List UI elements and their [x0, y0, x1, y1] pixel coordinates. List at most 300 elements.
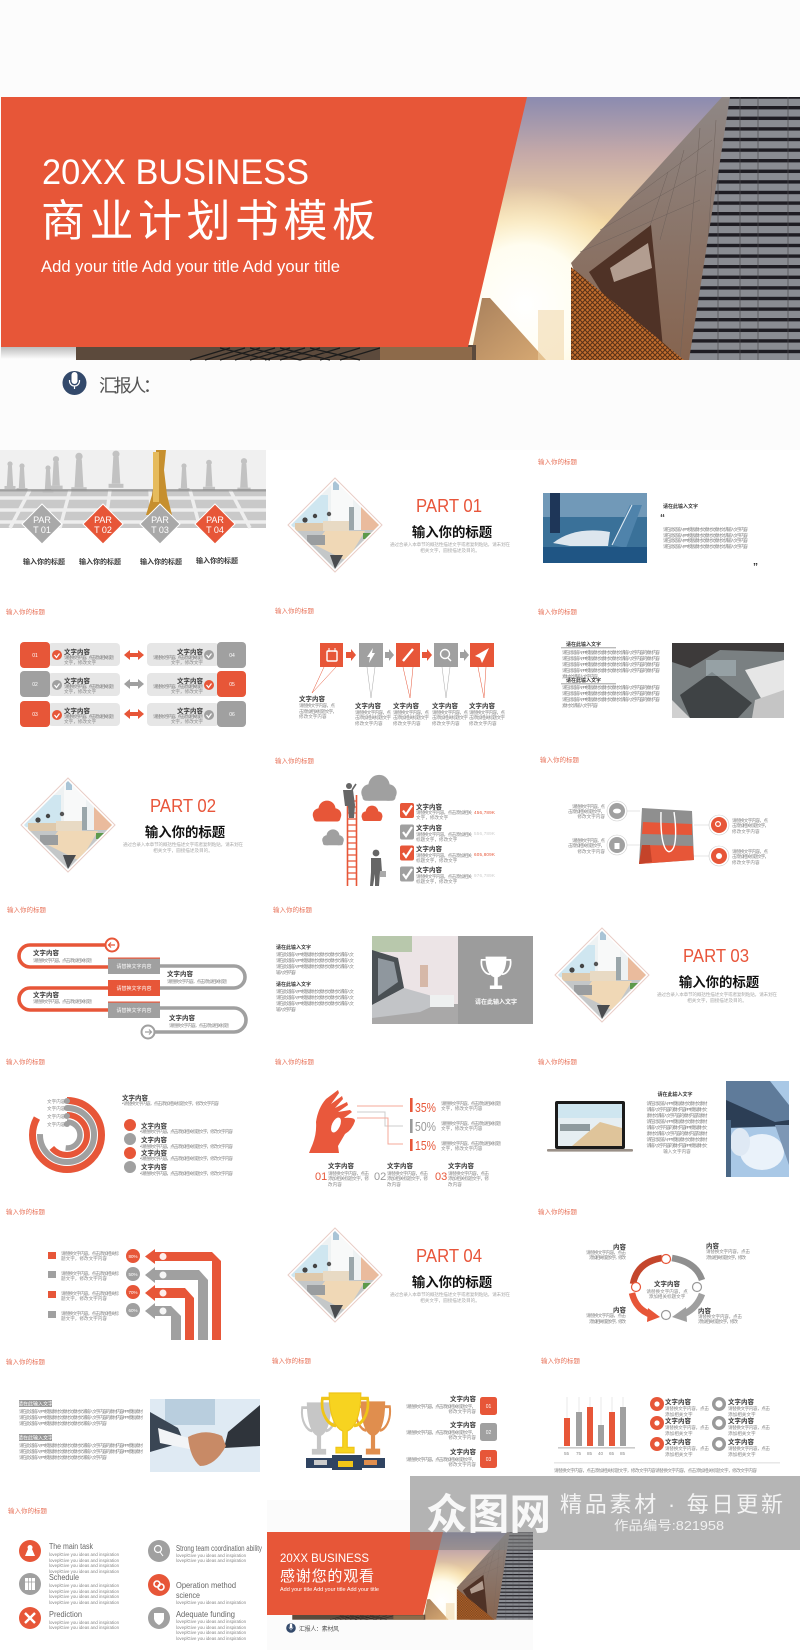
part badges: PAR: [206, 515, 224, 525]
numbered notes: 改内容: [448, 1181, 462, 1188]
slide: ladder and checklist: [275, 756, 496, 886]
process texts: 文字内容: [469, 701, 496, 710]
process texts: 击添加相关标题文字，: [299, 708, 337, 715]
process texts: 修改文字内容: [432, 720, 460, 727]
legend list: 文字内容: [141, 1162, 168, 1171]
side texts: 请替换文字内容，点: [572, 837, 605, 844]
bar chart: 85: [587, 1451, 593, 1456]
watermark slogan: 精品素材 · 每日更新: [560, 1492, 783, 1517]
numbered notes: 01: [315, 1171, 327, 1183]
timeline labels: 请替换文字内容，点击添加相关标题: [169, 1022, 229, 1029]
process texts: 修改文字内容: [355, 720, 383, 727]
slide: six paired steps: [6, 607, 246, 727]
text columns: 请在此处输入PPT模板素材文 素材文素材文请输入文字内容的素材内容: [562, 655, 660, 662]
cover slide: [1, 97, 800, 396]
thanks title english: 20XX BUSINESS: [280, 1551, 369, 1565]
centered text block: 请在此输入文字: [657, 1091, 693, 1098]
handshake photo: [150, 1399, 260, 1472]
side texts: 请替换文字内容，点: [732, 817, 768, 824]
side texts: 修改文字内容: [577, 813, 605, 820]
connector lines: [312, 667, 486, 698]
icon list: 文字内容: [665, 1437, 692, 1446]
slide heading: 输入你的标题: [6, 1057, 46, 1066]
text columns: 请在此处输入PPT模板素材文 素材文素材文请输入文: [276, 951, 354, 958]
notebook photo: [672, 643, 784, 718]
bar chart: 40: [598, 1451, 604, 1456]
left list: The main task: [49, 1541, 94, 1551]
checklist: 请替换文字内容，点击添加相关: [416, 831, 472, 838]
bar chart: 75: [576, 1451, 582, 1456]
icon list: 文字内容: [665, 1397, 692, 1406]
slide: part 04: [288, 1228, 510, 1322]
process texts: 请替换文字内容，点: [393, 709, 429, 716]
slide: snake timeline: [7, 905, 246, 1038]
step texts: 文字，修改文字: [171, 659, 203, 666]
text blocks: 请在此处输入PPT模板素材文 素材文素材文请输入文字内容: [19, 1454, 107, 1461]
checklist: 文字内容: [416, 844, 442, 853]
checklist: 文字内容: [416, 823, 442, 832]
panel caption: 请在此输入文字: [475, 998, 517, 1006]
step texts: 请替换文字内容，点击添加相关标题: [153, 683, 203, 690]
process texts: 请替换文字内容，点: [469, 709, 505, 716]
percentage texts: 请替换文字内容，点击添加相关标题: [441, 1140, 501, 1147]
trophies on podium: [302, 1393, 390, 1470]
icon list: 添加相关文字: [728, 1411, 756, 1418]
step texts: 请替换文字内容，点击添加相关标题: [64, 654, 114, 661]
numbered notes: 添加相关标题文字，修: [448, 1175, 489, 1182]
legend list: [124, 1119, 233, 1177]
text columns: 素材文请输入文字内容: [562, 673, 598, 680]
side texts: 修改文字内容: [732, 859, 760, 866]
centered text block: 素材文请输入文字内容的素材内容及素材: [646, 1112, 708, 1119]
right list: loveplGive you ideas and inspiration: [176, 1630, 246, 1635]
cycle texts: 内容: [698, 1306, 712, 1315]
left list: loveplGive you ideas and inspiration: [49, 1583, 119, 1588]
legend list: 文字内容: [141, 1121, 168, 1130]
footer note: 请替换文字内容，点击添加相关标题文字，修改文字内容请替换文字内容，点击添加相关标题文字，修改文字内容: [554, 1467, 757, 1474]
part title: 输入你的标题: [412, 1274, 493, 1290]
cycle arrows: [632, 1258, 702, 1322]
right list: loveplGive you ideas and inspiration: [176, 1553, 246, 1558]
text columns: 输入文字内容: [276, 969, 296, 976]
step texts: 文字，修改文字: [64, 659, 97, 666]
cycle texts: 内容: [613, 1242, 626, 1251]
process texts: 修改文字内容: [299, 713, 327, 720]
percentage texts: 文字，修改文字内容: [441, 1145, 483, 1152]
part description: 通过合录入本章节的概括性描述文字或者复制粘贴，请未划在: [657, 991, 777, 998]
timeline labels: 请替换文字内容，点击添加相关标题: [33, 957, 92, 964]
checklist: 文字，修改文字: [416, 814, 449, 821]
number blocks: 06: [229, 712, 235, 718]
centered text block: [646, 1091, 708, 1155]
numbered notes: 文字内容: [448, 1161, 474, 1170]
checklist: 605,809K: [474, 852, 496, 857]
laptop desk photo: [372, 936, 458, 1024]
timeline blocks: 请替换文字内容: [116, 985, 152, 992]
numbered notes: 改内容: [387, 1181, 401, 1188]
cycle texts: 内容: [706, 1241, 720, 1250]
part badges: PAR: [94, 515, 112, 525]
left list: loveplGive you ideas and inspiration: [49, 1589, 119, 1594]
side texts: [568, 803, 769, 866]
left list: loveplGive you ideas and inspiration: [49, 1563, 119, 1568]
process texts: 修改文字内容: [393, 720, 421, 727]
icon list: 请替换文字内容，点击: [728, 1424, 770, 1431]
chart description: [122, 1093, 219, 1107]
list texts: 题文字，修改文字内容: [61, 1315, 107, 1322]
gold trophy: [322, 1393, 368, 1453]
process texts: 击添加相关标题文字: [355, 714, 391, 721]
watermark logo: 众图网: [426, 1491, 551, 1538]
climbing figure: [343, 783, 356, 818]
laptop photo: [543, 493, 647, 563]
list texts: 题文字，修改文字内容: [61, 1275, 107, 1282]
part description: [123, 841, 243, 854]
text columns: 请在此处输入PPT模板素材文 素材文素材文请输入文: [276, 957, 354, 964]
slide: shopping bag: [540, 755, 769, 866]
step texts: 文字内容: [64, 676, 90, 685]
percentage texts: [441, 1100, 501, 1152]
watermark code: 作品编号:821958: [614, 1518, 724, 1533]
ladder: [347, 795, 357, 886]
timeline labels: 文字内容: [33, 990, 60, 999]
icon list: 添加相关文字: [665, 1430, 693, 1437]
chart description: • 请替换文字内容，点击添加相关标题文字，修改文字内容: [122, 1100, 219, 1107]
timeline labels: 请替换文字内容，点击添加相关标题: [33, 998, 92, 1005]
percent circles: 60%: [128, 1308, 138, 1313]
part description: 通过合录入本章节的概括性描述文字或者复制粘贴，请未划在: [390, 1291, 510, 1298]
checklist: 文字内容: [416, 802, 442, 811]
numbered notes: 添加相关标题文字，修: [328, 1175, 369, 1182]
sky buildings photo: [726, 1081, 789, 1177]
slide: radial chart: [6, 1057, 233, 1177]
left list: Schedule: [49, 1572, 79, 1582]
cycle texts: 请替换文字内容，点击: [586, 1249, 626, 1256]
text blocks: 请在此处输入PPT模板素材文 素材文素材文请输入文字内容: [19, 1420, 107, 1427]
number blocks: [20, 642, 246, 727]
text columns: 请在此处输入PPT模板素材文 素材文素材文请输入文: [276, 1000, 354, 1007]
cycle texts: 添加相关标题文字: [649, 1293, 686, 1300]
bronze trophy: [356, 1402, 390, 1454]
part description: [390, 541, 510, 554]
slide heading: 输入你的标题: [275, 756, 314, 765]
bar chart: 65: [609, 1451, 615, 1456]
slide: handshake: [6, 1357, 260, 1472]
thanks subtitle: Add your title Add your title Add your title: [280, 1587, 379, 1593]
process texts: 击添加相关标题文字: [393, 714, 429, 721]
icon list: 添加相关文字: [665, 1451, 693, 1458]
numbered notes: [315, 1161, 489, 1188]
left list: loveplGive you ideas and inspiration: [49, 1569, 119, 1574]
side texts: 修改文字内容: [732, 828, 760, 835]
ring labels: 文字内容: [47, 1105, 66, 1112]
text blocks: 请在此输入文字: [18, 1400, 53, 1408]
timeline labels: 文字内容: [169, 1013, 196, 1022]
ring labels: [47, 1098, 70, 1128]
side texts: 击添加相关标题文字，: [732, 822, 769, 829]
centered text block: 请输入文字内容的素材内容PPT模板素材文: [646, 1106, 708, 1113]
text columns: 请在此处输入PPT模板素材文 素材文素材文请输入文: [276, 994, 354, 1001]
percent circles: 80%: [128, 1254, 138, 1259]
cycle texts: 文字内容: [654, 1279, 680, 1288]
quote text: ”: [753, 562, 758, 573]
right list: Strong team coordination ability: [176, 1543, 262, 1553]
cycle texts: 添加相关标题文字，修改: [698, 1318, 738, 1325]
numbered notes: 改内容: [328, 1181, 342, 1188]
watermark band: [410, 1476, 800, 1550]
cycle texts: [586, 1241, 750, 1325]
slide: bent arrows: [6, 1207, 221, 1340]
part labels: 输入你的标题: [23, 557, 65, 566]
process squares: [320, 643, 494, 667]
part title: 输入你的标题: [412, 524, 493, 540]
icon circles: [19, 1540, 170, 1629]
icon list: 添加相关文字: [728, 1451, 756, 1458]
text blocks: 请在此输入文字: [18, 1434, 53, 1442]
podium: [306, 1455, 385, 1470]
percentage texts: 文字，修改文字内容: [441, 1105, 483, 1112]
tab texts: 文字内容: [450, 1420, 476, 1429]
numbered tabs: [480, 1397, 497, 1468]
checklist: 976,789K: [474, 873, 496, 878]
text columns: 请在此输入文字: [566, 641, 601, 648]
timeline blocks: [108, 958, 160, 1018]
slide: part 01: [288, 478, 510, 572]
checklist: 请替换文字内容，点击添加相关: [416, 852, 472, 859]
side texts: 击添加相关标题文字，: [568, 808, 605, 815]
text columns: [561, 641, 660, 709]
part badges: T 04: [206, 525, 224, 535]
left list: loveplGive you ideas and inspiration: [49, 1552, 119, 1557]
clouds: [313, 775, 397, 845]
slide: trophies: [272, 1356, 497, 1470]
slide heading: 输入你的标题: [275, 1057, 314, 1066]
tab texts: 修改文字内容: [448, 1461, 476, 1468]
text blocks: [18, 1400, 143, 1461]
percent circles: [126, 1249, 140, 1317]
process texts: 击添加相关标题文字: [469, 714, 505, 721]
snake track: [19, 945, 246, 1032]
icon: trophy: [481, 957, 511, 989]
right list: Adequate funding: [176, 1609, 235, 1619]
ring labels: 文字内容: [47, 1113, 66, 1120]
legend list: • 请替换文字内容，点击添加相关标题文字，修改文字内容: [140, 1155, 233, 1162]
numbered tabs: 03: [486, 1457, 491, 1463]
number blocks: 01: [32, 653, 38, 659]
part badges: T 02: [94, 525, 112, 535]
slide heading: 输入你的标题: [6, 1207, 46, 1216]
laptop mockup: [547, 1101, 633, 1152]
text blocks: 请在此处输入PPT模板素材文 素材文素材文请输入文字内容的素材内容PPT模板素材: [19, 1408, 143, 1415]
quote text: 请在此处输入PPT模板素材文 素材文素材文请输入文字内容: [663, 543, 748, 550]
slide: chess parts: [0, 450, 266, 566]
list texts: 请替换文字内容，点击添加相关标: [61, 1310, 119, 1317]
right list: loveplGive you ideas and inspiration: [176, 1625, 246, 1630]
tab texts: 请替换文字内容，点击添加相关标题文字，: [406, 1403, 476, 1410]
part description: 通过合录入本章节的概括性描述文字或者复制粘贴，请未划在: [123, 841, 243, 848]
tab texts: 请替换文字内容，点击添加相关标题文字，: [406, 1456, 476, 1463]
timeline labels: [33, 948, 229, 1029]
left list: [49, 1541, 119, 1630]
reporter label: 汇报人：: [99, 376, 161, 396]
tab texts: 修改文字内容: [448, 1434, 476, 1441]
tab texts: [406, 1394, 476, 1468]
ring labels: 文字内容: [47, 1098, 66, 1105]
legend list: 文字内容: [141, 1148, 168, 1157]
percentage texts: 请替换文字内容，点击添加相关标题: [441, 1100, 501, 1107]
checklist: 456,789K: [474, 810, 496, 815]
connector lines: [627, 811, 709, 856]
percent circles: 70%: [128, 1290, 138, 1295]
checklist: 请替换文字内容，点击添加相关: [416, 809, 472, 816]
thanks orange panel: [267, 1532, 443, 1615]
tab texts: 文字内容: [450, 1394, 476, 1403]
list texts: 请替换文字内容，点击添加相关标: [61, 1290, 119, 1297]
step texts: 文字内容: [64, 647, 90, 656]
part description: [657, 991, 777, 1004]
icon list: 请替换文字内容，点击: [665, 1424, 709, 1431]
centered text block: 素材文请输入文字内容的素材内容及素材: [646, 1130, 708, 1137]
left list: loveplGive you ideas and inspiration: [49, 1558, 119, 1563]
text columns: 请在此处输入PPT模板素材文 素材文素材文请输入文字内容的素材内容: [562, 661, 660, 668]
cycle texts: 添加相关标题文字，修改: [589, 1254, 626, 1261]
text columns: 请在此处输入PPT模板素材文 素材文素材文请输入文: [276, 988, 354, 995]
side texts: 修改文字内容: [577, 848, 605, 855]
icon list: 请替换文字内容，点击: [665, 1405, 709, 1412]
slide: laptop and sky photo: [538, 1057, 789, 1177]
step texts: 文字，修改文字: [64, 718, 97, 725]
cycle texts: 请替换文字内容，点击: [698, 1313, 742, 1320]
step texts: 文字内容: [177, 706, 204, 715]
part badges: T 01: [33, 525, 51, 535]
icon: microphone: [62, 371, 86, 395]
percentages: [410, 1098, 436, 1153]
icon list: 文字内容: [665, 1416, 692, 1425]
icon list: 文字内容: [728, 1397, 754, 1406]
part number: PART 02: [150, 796, 216, 816]
standing figure: [370, 850, 386, 886]
icon: hand: [309, 1090, 355, 1153]
part description: 相关文字，圆接描述及目的。: [153, 847, 213, 854]
slide: thanks: [267, 1500, 533, 1650]
icon list: 文字内容: [728, 1416, 754, 1425]
icon list: 请替换文字内容，点击: [728, 1405, 770, 1412]
reporter label: 汇报人：素材风: [299, 1625, 339, 1633]
cycle texts: 添加相关标题文字，修改: [589, 1318, 626, 1325]
step texts: 请替换文字内容，点击添加相关标题: [64, 683, 114, 690]
timeline labels: 请替换文字内容，点击添加相关标题: [167, 978, 227, 985]
quote text: [660, 503, 758, 573]
timeline blocks: 请替换文字内容: [116, 963, 152, 970]
text columns: 素材文请输入文字内容: [562, 702, 598, 709]
process texts: 请替换文字内容，点: [299, 702, 335, 709]
part number: PART 03: [683, 946, 749, 966]
side texts: 请替换文字内容，点: [732, 848, 768, 855]
radial bar chart: [32, 1100, 102, 1170]
slide heading: 输入你的标题: [538, 1057, 578, 1066]
slide heading: 输入你的标题: [272, 1356, 312, 1365]
cycle texts: 请替换文字内容，点击: [706, 1248, 750, 1255]
numbered notes: 文字内容: [328, 1161, 354, 1170]
part title: 输入你的标题: [145, 824, 226, 840]
step texts: 文字内容: [177, 676, 204, 685]
icon list: 请替换文字内容，点击: [665, 1445, 709, 1452]
icon list: [650, 1397, 770, 1458]
left list: loveplGive you ideas and inspiration: [49, 1600, 119, 1605]
part badges: T 03: [151, 525, 169, 535]
text columns: 请在此输入文字: [276, 944, 311, 951]
slide: five step process: [275, 606, 505, 727]
numbered notes: 请替换文字内容，点击: [448, 1170, 489, 1177]
list texts: 请替换文字内容，点击添加相关标: [61, 1270, 119, 1277]
part labels: 输入你的标题: [79, 557, 121, 566]
right list: loveplGive you ideas and inspiration: [176, 1636, 246, 1641]
left list: loveplGive you ideas and inspiration: [49, 1620, 119, 1625]
side texts: 击添加相关标题文字，: [732, 853, 769, 860]
right list: loveplGive you ideas and inspiration: [176, 1619, 246, 1624]
percent circles: 50%: [128, 1272, 138, 1277]
cover title english: 20XX BUSINESS: [42, 153, 309, 192]
slide heading: 输入你的标题: [538, 457, 578, 466]
step texts: 文字，修改文字: [64, 688, 97, 695]
check badges: [52, 650, 214, 720]
step texts: 文字内容: [177, 647, 204, 656]
percentages: 50%: [415, 1119, 436, 1134]
percentages: 35%: [415, 1100, 436, 1115]
slide heading: 输入你的标题: [7, 905, 46, 914]
number blocks: 04: [229, 653, 235, 659]
list texts: 请替换文字内容，点击添加相关标: [61, 1250, 119, 1257]
text blocks: 请在此处输入PPT模板素材文 素材文素材文请输入文字内容的素材内容PPT模板素材: [19, 1442, 143, 1449]
part number: PART 01: [416, 496, 482, 516]
checklist: 标题文字，修改文字: [416, 836, 458, 843]
process arrows: [346, 649, 469, 661]
checklist: 标题文字，修改文字: [416, 857, 458, 864]
step texts: 文字内容: [64, 706, 90, 715]
checklist: 标题文字，修改文字: [416, 878, 458, 885]
thanks photo: [292, 1532, 533, 1620]
part description: 通过合录入本章节的概括性描述文字或者复制粘贴，请未划在: [390, 541, 510, 548]
step texts: [64, 647, 204, 725]
icon list: 添加相关文字: [728, 1430, 756, 1437]
step texts: 文字，修改文字: [171, 718, 203, 725]
slide: part 02: [21, 778, 243, 872]
cycle texts: 添加相关标题文字，修改: [706, 1254, 746, 1261]
numbered notes: 02: [374, 1171, 386, 1183]
text blocks: 请在此处输入PPT模板素材文 素材文素材文请输入文字内容的素材内容PPT模板素材: [19, 1414, 143, 1421]
timeline blocks: 请替换文字内容: [116, 1007, 152, 1014]
step texts: 请替换文字内容，点击添加相关标题: [64, 713, 114, 720]
slide: text and notebook photo: [538, 607, 784, 718]
legend list: 文字内容: [141, 1135, 168, 1144]
timeline labels: 文字内容: [33, 948, 60, 957]
side texts: 击添加相关标题文字，: [568, 842, 605, 849]
process texts: 文字内容: [299, 694, 326, 703]
numbered notes: 请替换文字内容，点击: [387, 1170, 428, 1177]
left list: loveplGive you ideas and inspiration: [49, 1594, 119, 1599]
right list: science: [176, 1590, 200, 1600]
cycle nodes: [632, 1254, 702, 1320]
text columns: 请在此处输入PPT模板素材文 素材文素材文请输入文字内容的素材内容: [562, 684, 660, 691]
part number: PART 04: [416, 1246, 482, 1266]
side texts: 请替换文字内容，点: [572, 803, 605, 810]
side icons: [607, 801, 729, 866]
percentages: 15%: [415, 1138, 436, 1153]
cover slide background: [0, 0, 800, 450]
step texts: 请替换文字内容，点击添加相关标题: [153, 654, 203, 661]
part description: 相关文字，圆接描述及目的。: [687, 997, 747, 1004]
timeline labels: 文字内容: [167, 969, 194, 978]
